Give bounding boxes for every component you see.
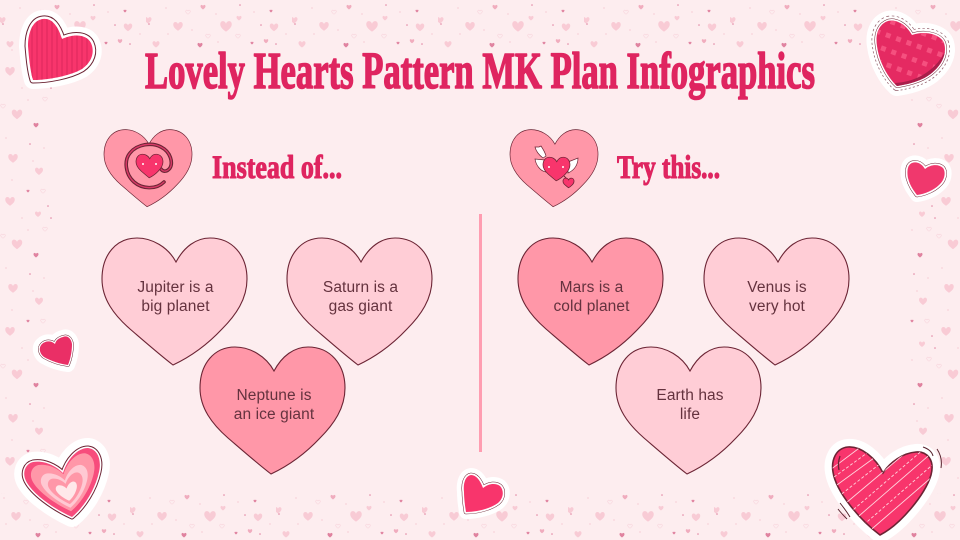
sticker: small heart left: [40, 336, 72, 365]
heart: Earth: Earth has: [656, 387, 724, 404]
sticker: concentric heart bottom left: [24, 448, 100, 517]
heart: Mars: [518, 238, 663, 365]
heart: Neptune: Neptune is: [236, 387, 312, 404]
heart: Saturn: Saturn is a: [323, 279, 398, 296]
heart: Venus: very hot: [749, 298, 806, 315]
heart: Jupiter: Jupiter is a: [137, 279, 214, 296]
heart: Saturn: gas giant: [329, 298, 393, 315]
heading: try this: Try this...: [617, 150, 720, 186]
sticker: striped heart top left: [28, 10, 93, 90]
heart: Venus: Venus is: [747, 279, 807, 296]
panel: try this: [510, 130, 849, 474]
divider: [479, 214, 482, 452]
icon: heart with at-sign: [104, 130, 192, 207]
icon: winged heart: [510, 130, 598, 207]
heart: Mars: Mars is a: [560, 279, 624, 296]
heart: Neptune: an ice giant: [234, 406, 315, 423]
heart: Mars: cold planet: [553, 298, 630, 315]
heading: instead of: Instead of...: [212, 150, 342, 186]
heart: Jupiter: [102, 238, 247, 365]
sticker: patterned heart top right: [866, 18, 955, 90]
panel: instead of: [102, 130, 432, 474]
sticker: small heart right: [907, 162, 945, 195]
heart: Neptune: [200, 347, 345, 474]
sticker: striped heart bottom right: [830, 440, 941, 540]
heart: Saturn: [287, 238, 432, 365]
heart: Venus: [704, 238, 849, 365]
sticker: heart bottom centre: [464, 475, 503, 512]
heart: Earth: life: [680, 406, 700, 423]
heart: Jupiter: big planet: [141, 298, 210, 315]
heart: Earth: [616, 347, 761, 474]
